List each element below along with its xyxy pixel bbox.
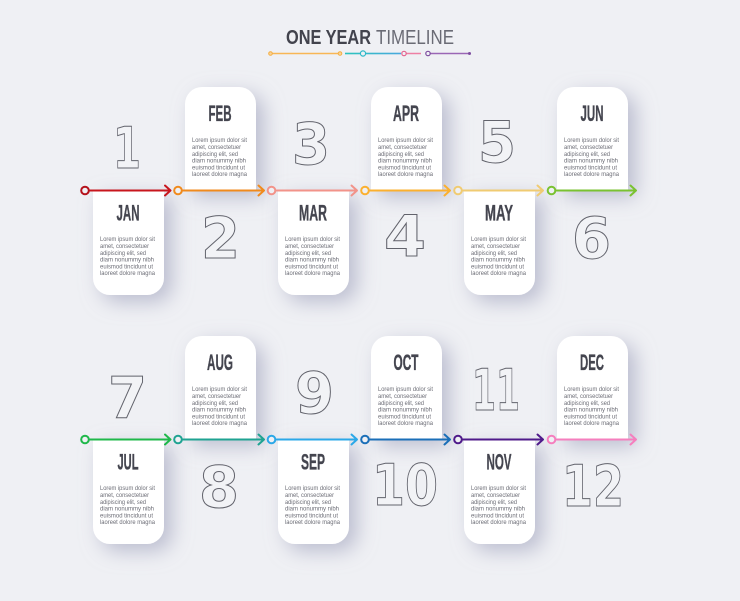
card: NOV: adipiscing elit, sed: [471, 500, 517, 506]
title text: TIMELINE: [376, 27, 454, 49]
arrow: February: [174, 186, 264, 196]
card: DEC: [557, 336, 628, 439]
number 11: 11: [472, 358, 520, 424]
number 5: 5: [478, 110, 516, 176]
card: SEP: euismod tincidunt ut: [285, 514, 338, 520]
card: JUN: euismod tincidunt ut: [564, 166, 617, 172]
card: NOV: euismod tincidunt ut: [471, 514, 524, 520]
card: FEB: euismod tincidunt ut: [192, 166, 245, 172]
card: MAY: euismod tincidunt ut: [471, 264, 524, 270]
card: FEB: amet, consectetuer: [192, 145, 241, 151]
card: OCT: amet, consectetuer: [378, 394, 427, 400]
card: NOV: amet, consectetuer: [471, 493, 520, 499]
card: JAN: euismod tincidunt ut: [100, 264, 153, 270]
arrow: December: [548, 434, 636, 444]
card: DEC: adipiscing elit, sed: [564, 401, 610, 407]
number 10: 10: [372, 453, 438, 519]
card: AUG: laoreet dolore magna: [192, 421, 248, 427]
arrow: June: [548, 186, 636, 196]
card: OCT: euismod tincidunt ut: [378, 414, 431, 420]
card: SEP: laoreet dolore magna: [285, 520, 341, 526]
card: AUG: adipiscing elit, sed: [192, 401, 238, 407]
card: MAY: adipiscing elit, sed: [471, 251, 517, 257]
card: APR: diam nonummy nibh: [378, 158, 432, 164]
card: FEB: FEB: [208, 101, 232, 126]
card: OCT: OCT: [394, 350, 419, 375]
card: AUG: AUG: [207, 350, 233, 375]
card: OCT: diam nonummy nibh: [378, 408, 432, 414]
card: JAN: diam nonummy nibh: [100, 258, 154, 264]
card: DEC: DEC: [580, 350, 604, 375]
card: JAN: laoreet dolore magna: [100, 271, 156, 277]
card: JAN: JAN: [116, 200, 140, 226]
arrow: November: [454, 434, 543, 444]
number 12: 12: [562, 454, 624, 520]
card: JUN: [557, 87, 628, 190]
card: MAY: Lorem ipsum dolor sit: [471, 237, 526, 243]
card: APR: adipiscing elit, sed: [378, 152, 424, 158]
card: SEP: Lorem ipsum dolor sit: [285, 486, 340, 492]
card: NOV: Lorem ipsum dolor sit: [471, 486, 526, 492]
card: NOV: laoreet dolore magna: [471, 520, 527, 526]
card: JUL: [93, 439, 164, 544]
card: MAY: [464, 190, 535, 295]
number 3: 3: [292, 112, 330, 178]
card: SEP: amet, consectetuer: [285, 493, 334, 499]
card: NOV: diam nonummy nibh: [471, 506, 525, 512]
card: SEP: [278, 439, 349, 544]
number 8: 8: [199, 455, 239, 521]
card: MAY: amet, consectetuer: [471, 244, 520, 250]
card: JAN: adipiscing elit, sed: [100, 251, 146, 257]
card: JUN: diam nonummy nibh: [564, 158, 618, 164]
arrow: March: [268, 186, 357, 196]
card: APR: APR: [393, 101, 419, 126]
card: OCT: Lorem ipsum dolor sit: [378, 387, 433, 393]
card: FEB: Lorem ipsum dolor sit: [192, 138, 247, 144]
arrow: July: [81, 434, 170, 444]
card: JUL: diam nonummy nibh: [100, 506, 154, 512]
card: APR: Lorem ipsum dolor sit: [378, 138, 433, 144]
card: SEP: adipiscing elit, sed: [285, 500, 331, 506]
card: APR: amet, consectetuer: [378, 145, 427, 151]
card: AUG: euismod tincidunt ut: [192, 414, 245, 420]
card: MAR: euismod tincidunt ut: [285, 264, 338, 270]
card: APR: [371, 87, 442, 190]
card: JAN: amet, consectetuer: [100, 244, 149, 250]
arrow: September: [268, 434, 357, 444]
number 1: 1: [113, 116, 141, 182]
card: JUN: Lorem ipsum dolor sit: [564, 138, 619, 144]
card: JUN: laoreet dolore magna: [564, 172, 620, 178]
card: DEC: laoreet dolore magna: [564, 421, 620, 427]
card: SEP: SEP: [301, 450, 325, 474]
title underline: [269, 51, 471, 56]
card: NOV: [464, 439, 535, 544]
card: OCT: [371, 336, 442, 439]
card: APR: euismod tincidunt ut: [378, 166, 431, 172]
card: MAR: laoreet dolore magna: [285, 271, 341, 277]
arrow: August: [174, 434, 264, 444]
card: JAN: Lorem ipsum dolor sit: [100, 237, 155, 243]
card: MAY: diam nonummy nibh: [471, 258, 525, 264]
card: AUG: diam nonummy nibh: [192, 408, 246, 414]
title text: ONE YEAR: [286, 27, 371, 49]
card: AUG: Lorem ipsum dolor sit: [192, 387, 247, 393]
card: JUL: JUL: [118, 450, 138, 474]
card: JAN: [93, 190, 164, 295]
card: NOV: NOV: [486, 450, 512, 474]
card: OCT: laoreet dolore magna: [378, 421, 434, 427]
card: MAY: MAY: [485, 200, 513, 226]
card: AUG: amet, consectetuer: [192, 394, 241, 400]
arrow: January: [81, 186, 170, 196]
number 4: 4: [384, 204, 426, 270]
card: DEC: amet, consectetuer: [564, 394, 613, 400]
card: MAY: laoreet dolore magna: [471, 271, 527, 277]
arrow: October: [361, 434, 450, 444]
card: MAR: Lorem ipsum dolor sit: [285, 237, 340, 243]
number 2: 2: [201, 206, 240, 272]
card: DEC: euismod tincidunt ut: [564, 414, 617, 420]
card: JUL: euismod tincidunt ut: [100, 514, 153, 520]
card: DEC: diam nonummy nibh: [564, 408, 618, 414]
card: MAR: adipiscing elit, sed: [285, 251, 331, 257]
card: MAR: MAR: [299, 200, 327, 226]
card: SEP: diam nonummy nibh: [285, 506, 339, 512]
card: FEB: adipiscing elit, sed: [192, 152, 238, 158]
card: JUL: amet, consectetuer: [100, 493, 149, 499]
card: JUN: adipiscing elit, sed: [564, 152, 610, 158]
number 6: 6: [572, 206, 611, 272]
card: JUN: JUN: [580, 101, 604, 126]
number 7: 7: [108, 366, 147, 432]
card: MAR: [278, 190, 349, 295]
arrow: April: [361, 186, 450, 196]
number 9: 9: [295, 361, 334, 427]
card: JUL: laoreet dolore magna: [100, 520, 156, 526]
card: FEB: [185, 87, 256, 190]
card: FEB: diam nonummy nibh: [192, 158, 246, 164]
card: FEB: laoreet dolore magna: [192, 172, 248, 178]
arrow: May: [454, 186, 543, 196]
card: JUN: amet, consectetuer: [564, 145, 613, 151]
card: MAR: diam nonummy nibh: [285, 258, 339, 264]
card: JUL: Lorem ipsum dolor sit: [100, 486, 155, 492]
card: DEC: Lorem ipsum dolor sit: [564, 387, 619, 393]
card: AUG: [185, 336, 256, 439]
card: OCT: adipiscing elit, sed: [378, 401, 424, 407]
card: APR: laoreet dolore magna: [378, 172, 434, 178]
card: JUL: adipiscing elit, sed: [100, 500, 146, 506]
title: [269, 27, 471, 56]
card: MAR: amet, consectetuer: [285, 244, 334, 250]
